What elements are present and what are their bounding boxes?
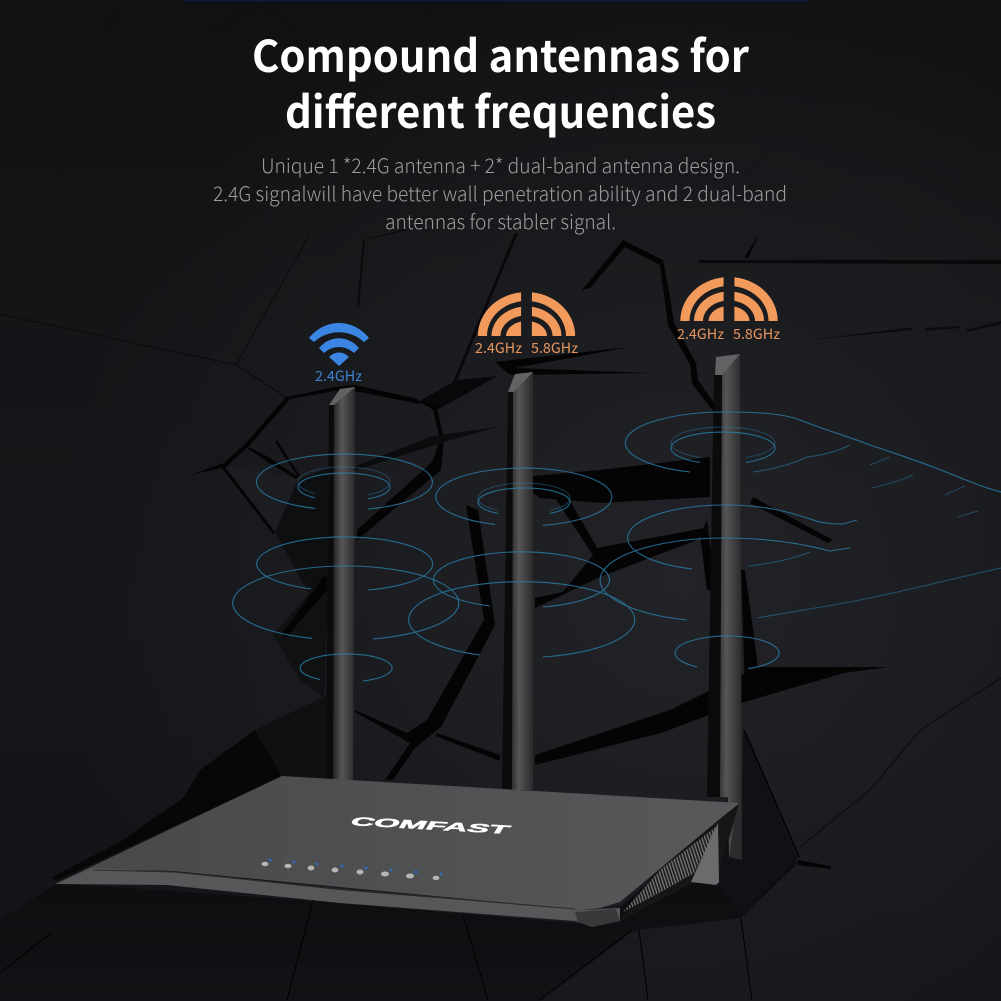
lower cracks — [0, 900, 752, 1000]
title: different frequencies — [285, 77, 716, 141]
antenna 3 — [707, 354, 742, 860]
icon: dual-band signal — [478, 292, 575, 336]
description text: Unique 1 *2.4G antenna + 2* dual-band antenna design. — [261, 150, 740, 179]
facets around the first antenna — [225, 466, 328, 778]
thin cracks on the left — [0, 237, 308, 397]
side vent — [623, 826, 717, 912]
shadow right of the router — [716, 730, 798, 910]
label: 5.8GHz: 5.8GHz — [531, 338, 578, 358]
description text: 2.4G signalwill have better wall penetration ability and 2 dual-band — [213, 178, 787, 207]
subtle right crack — [800, 678, 1001, 847]
orange dual-band icon, antenna 2 — [475, 292, 578, 358]
icon: wifi 2.4GHz — [309, 323, 369, 366]
top surface — [55, 776, 739, 910]
front lip — [55, 868, 620, 927]
waves: antenna 2 — [409, 468, 635, 657]
dark fractures — [52, 229, 1001, 881]
antenna 2 — [502, 372, 533, 790]
description text: antennas for stabler signal. — [385, 206, 616, 235]
fine cracks at the top — [0, 3, 811, 193]
shadow below the router — [0, 800, 798, 1001]
icon: dual-band signal — [680, 277, 778, 321]
status lights — [262, 859, 442, 880]
blue wifi icon and label — [309, 323, 369, 386]
description text — [213, 150, 787, 235]
router — [55, 776, 742, 927]
right foot — [729, 808, 742, 860]
waves: antenna 3 — [600, 412, 1001, 669]
side foot wedge — [691, 823, 719, 885]
label: 2.4GHz: 2.4GHz — [475, 338, 522, 358]
front groove — [93, 870, 575, 909]
label: 2.4GHz: 2.4GHz — [677, 324, 724, 344]
top edge strip — [185, 0, 808, 1]
logo: COMFAST: COMFAST — [347, 814, 514, 837]
signal waves — [233, 412, 1001, 681]
front corner — [575, 909, 620, 927]
waves: antenna 1 — [233, 454, 459, 681]
label: 2.4GHz: 2.4GHz — [315, 366, 362, 386]
label: 5.8GHz: 5.8GHz — [733, 324, 780, 344]
title: Compound antennas for — [252, 21, 750, 85]
orange dual-band icon, antenna 3 — [677, 277, 780, 344]
side shell — [620, 804, 739, 921]
title — [252, 21, 750, 141]
antenna 1 — [326, 387, 355, 780]
